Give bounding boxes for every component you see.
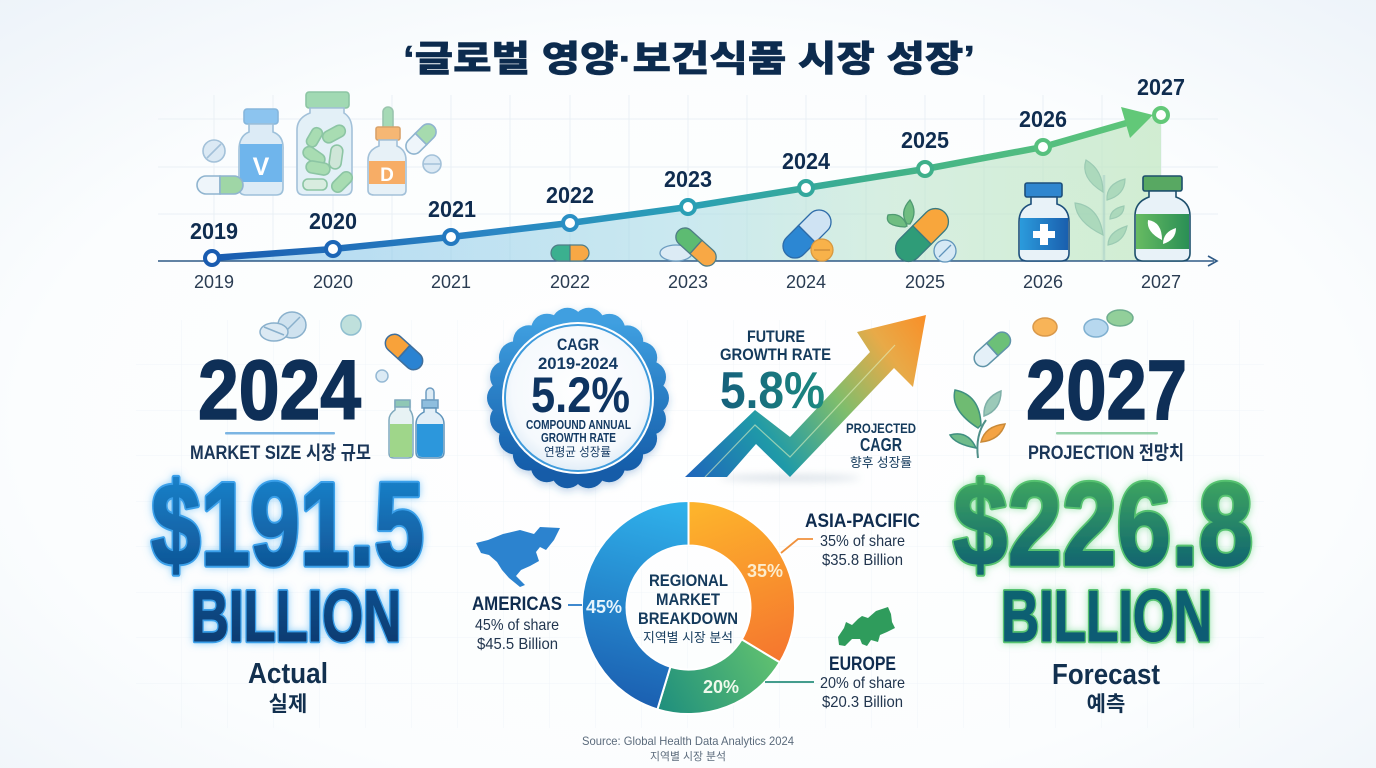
center label: BREAKDOWN [638, 609, 738, 628]
panel: 2027 projection [950, 310, 1253, 716]
heading: 2027: 2027 [1026, 343, 1187, 437]
area under growth line [212, 115, 1161, 261]
icon: blue V bottle [239, 109, 283, 195]
label: market size: MARKET SIZE 시장 규모 [190, 442, 371, 464]
callout: Europe: 20% of share [820, 675, 905, 692]
big value: billion: BILLION [191, 577, 401, 657]
text: compound annual: COMPOUND ANNUAL [526, 417, 631, 432]
scalloped seal [494, 314, 662, 482]
label: forecast korean: 예측 [1087, 693, 1125, 716]
growth line with arrow [212, 107, 1153, 258]
year labels above line: 2022 [546, 182, 594, 208]
center label [638, 571, 738, 645]
callout: Asia-Pacific: ASIA-PACIFIC [805, 511, 920, 532]
source note: Source: Global Health Data Analytics 2024 [582, 734, 794, 748]
callout: Americas: 45% of share [475, 617, 559, 634]
center label: REGIONAL [649, 571, 728, 590]
year labels on axis: 2026 [1023, 272, 1063, 292]
icon: pills 2024 [778, 205, 836, 263]
label: actual: Actual [248, 658, 328, 690]
center label: 지역별 시장 분석 [643, 630, 733, 645]
segment: Europe 20% [657, 639, 780, 714]
text: korean projected: 향후 성장률 [850, 455, 912, 470]
text: growth rate: GROWTH RATE [541, 430, 616, 445]
year labels on axis: 2022 [550, 272, 590, 292]
year labels on axis: 2024 [786, 272, 826, 292]
label: actual korean: 실제 [269, 693, 307, 716]
callout: Asia-Pacific: $35.8 Billion [822, 552, 903, 569]
icon: pills 2023 [660, 224, 720, 270]
panel: 2024 market size [151, 312, 444, 716]
callout: Americas: $45.5 Billion [477, 636, 558, 653]
text: projected: PROJECTED [846, 420, 916, 436]
callout: Europe: $20.3 Billion [822, 694, 903, 711]
donut chart: regional breakdown [472, 501, 920, 714]
source note: 지역별 시장 분석 [650, 750, 726, 763]
year labels on axis [194, 272, 1181, 292]
timeline nodes [205, 108, 1168, 265]
timeline axis [158, 256, 1217, 266]
big value: $191.5: $191.5 [151, 459, 424, 591]
icon: dropper D bottle [368, 107, 406, 195]
year labels on axis: 2021 [431, 272, 471, 292]
center label: MARKET [656, 590, 721, 609]
year labels on axis: 2025 [905, 272, 945, 292]
divider [225, 432, 335, 434]
big value: billion: BILLION [191, 577, 401, 657]
year labels on axis: 2019 [194, 272, 234, 292]
callout: Americas: AMERICAS [472, 594, 562, 615]
illustration: vitamin bottles top left [197, 92, 441, 195]
big value: $191.5: $191.5 [151, 459, 424, 591]
lower grid [136, 320, 1264, 728]
callout: Europe: EUROPE [829, 654, 896, 675]
percent labels [586, 561, 783, 697]
segment: Americas 45% [582, 501, 688, 709]
value: 5.8%: 5.8% [720, 362, 825, 420]
text: growth rate: GROWTH RATE [720, 345, 831, 364]
year labels on axis: 2023 [668, 272, 708, 292]
icon: round tablet [423, 155, 441, 173]
year labels above line: 2024 [782, 148, 830, 174]
label: forecast: Forecast [1052, 659, 1160, 691]
text: CAGR: CAGR [860, 435, 902, 455]
year labels above line: 2019 [190, 218, 238, 244]
text: future: FUTURE [747, 327, 805, 346]
heading: 2024: 2024 [198, 343, 361, 437]
year labels above line: 2023 [664, 166, 712, 192]
future growth arrow [685, 315, 926, 481]
arrow highlight [705, 345, 895, 477]
segment: Asia-Pacific 35% [688, 501, 795, 662]
year labels above line: 2020 [309, 208, 357, 234]
icon: jar of capsules [297, 92, 355, 195]
icon: plant [1075, 160, 1127, 261]
big value: billion: BILLION [1001, 577, 1212, 657]
percent labels: 35% [747, 561, 783, 581]
value: 5.2%: 5.2% [531, 367, 630, 423]
callout: Asia-Pacific [781, 511, 920, 569]
year labels above line: 2021 [428, 196, 476, 222]
year labels above line: 2025 [901, 127, 949, 153]
percent labels: 45% [586, 597, 622, 617]
year labels on axis: 2027 [1141, 272, 1181, 292]
arrow shadow [720, 475, 860, 481]
text: CAGR: CAGR [557, 335, 599, 354]
year labels on axis: 2020 [313, 272, 353, 292]
icon: pills and leaves 2025 [887, 200, 956, 267]
icon: dropper D bottle: D [380, 165, 394, 186]
title: ‘글로벌 영양·보건식품 시장 성장’ [403, 38, 975, 79]
label: projection: PROJECTION 전망치 [1028, 442, 1184, 464]
divider [1056, 432, 1158, 434]
icon: capsule 2022 [551, 245, 589, 261]
big value: billion: BILLION [1001, 577, 1212, 657]
percent labels: 20% [703, 677, 739, 697]
source note [582, 734, 794, 763]
seal inner disc [502, 322, 654, 474]
badge: CAGR 2019-2024 [494, 314, 662, 482]
year labels above line [190, 74, 1185, 244]
icon: bottle 2026 [1019, 183, 1069, 261]
year labels above line: 2026 [1019, 106, 1067, 132]
timeline grid [158, 95, 1218, 261]
icon: map of Europe [838, 607, 895, 646]
icon: bottle 2027 [1135, 176, 1190, 261]
year labels above line: 2027 [1137, 74, 1185, 100]
callout: Asia-Pacific: 35% of share [820, 533, 905, 550]
icon: pills and bottles left [260, 312, 444, 458]
icon: capsule horizontal [197, 176, 243, 194]
icon: pills and leaves right [950, 310, 1133, 458]
text: korean rate: 연평균 성장률 [544, 445, 611, 459]
zigzag arrow [685, 315, 926, 477]
icon: small capsule [403, 121, 439, 157]
big value: $226.8: $226.8 [953, 459, 1253, 591]
timeline chart [158, 74, 1217, 292]
icon: tablet [203, 140, 225, 162]
text: period: 2019-2024 [538, 354, 619, 373]
callout: Americas [472, 594, 582, 653]
icon: blue V bottle: V [253, 153, 270, 181]
callout: Europe [765, 654, 905, 711]
icon: map of the Americas [476, 527, 560, 587]
big value: $226.8: $226.8 [953, 459, 1253, 591]
